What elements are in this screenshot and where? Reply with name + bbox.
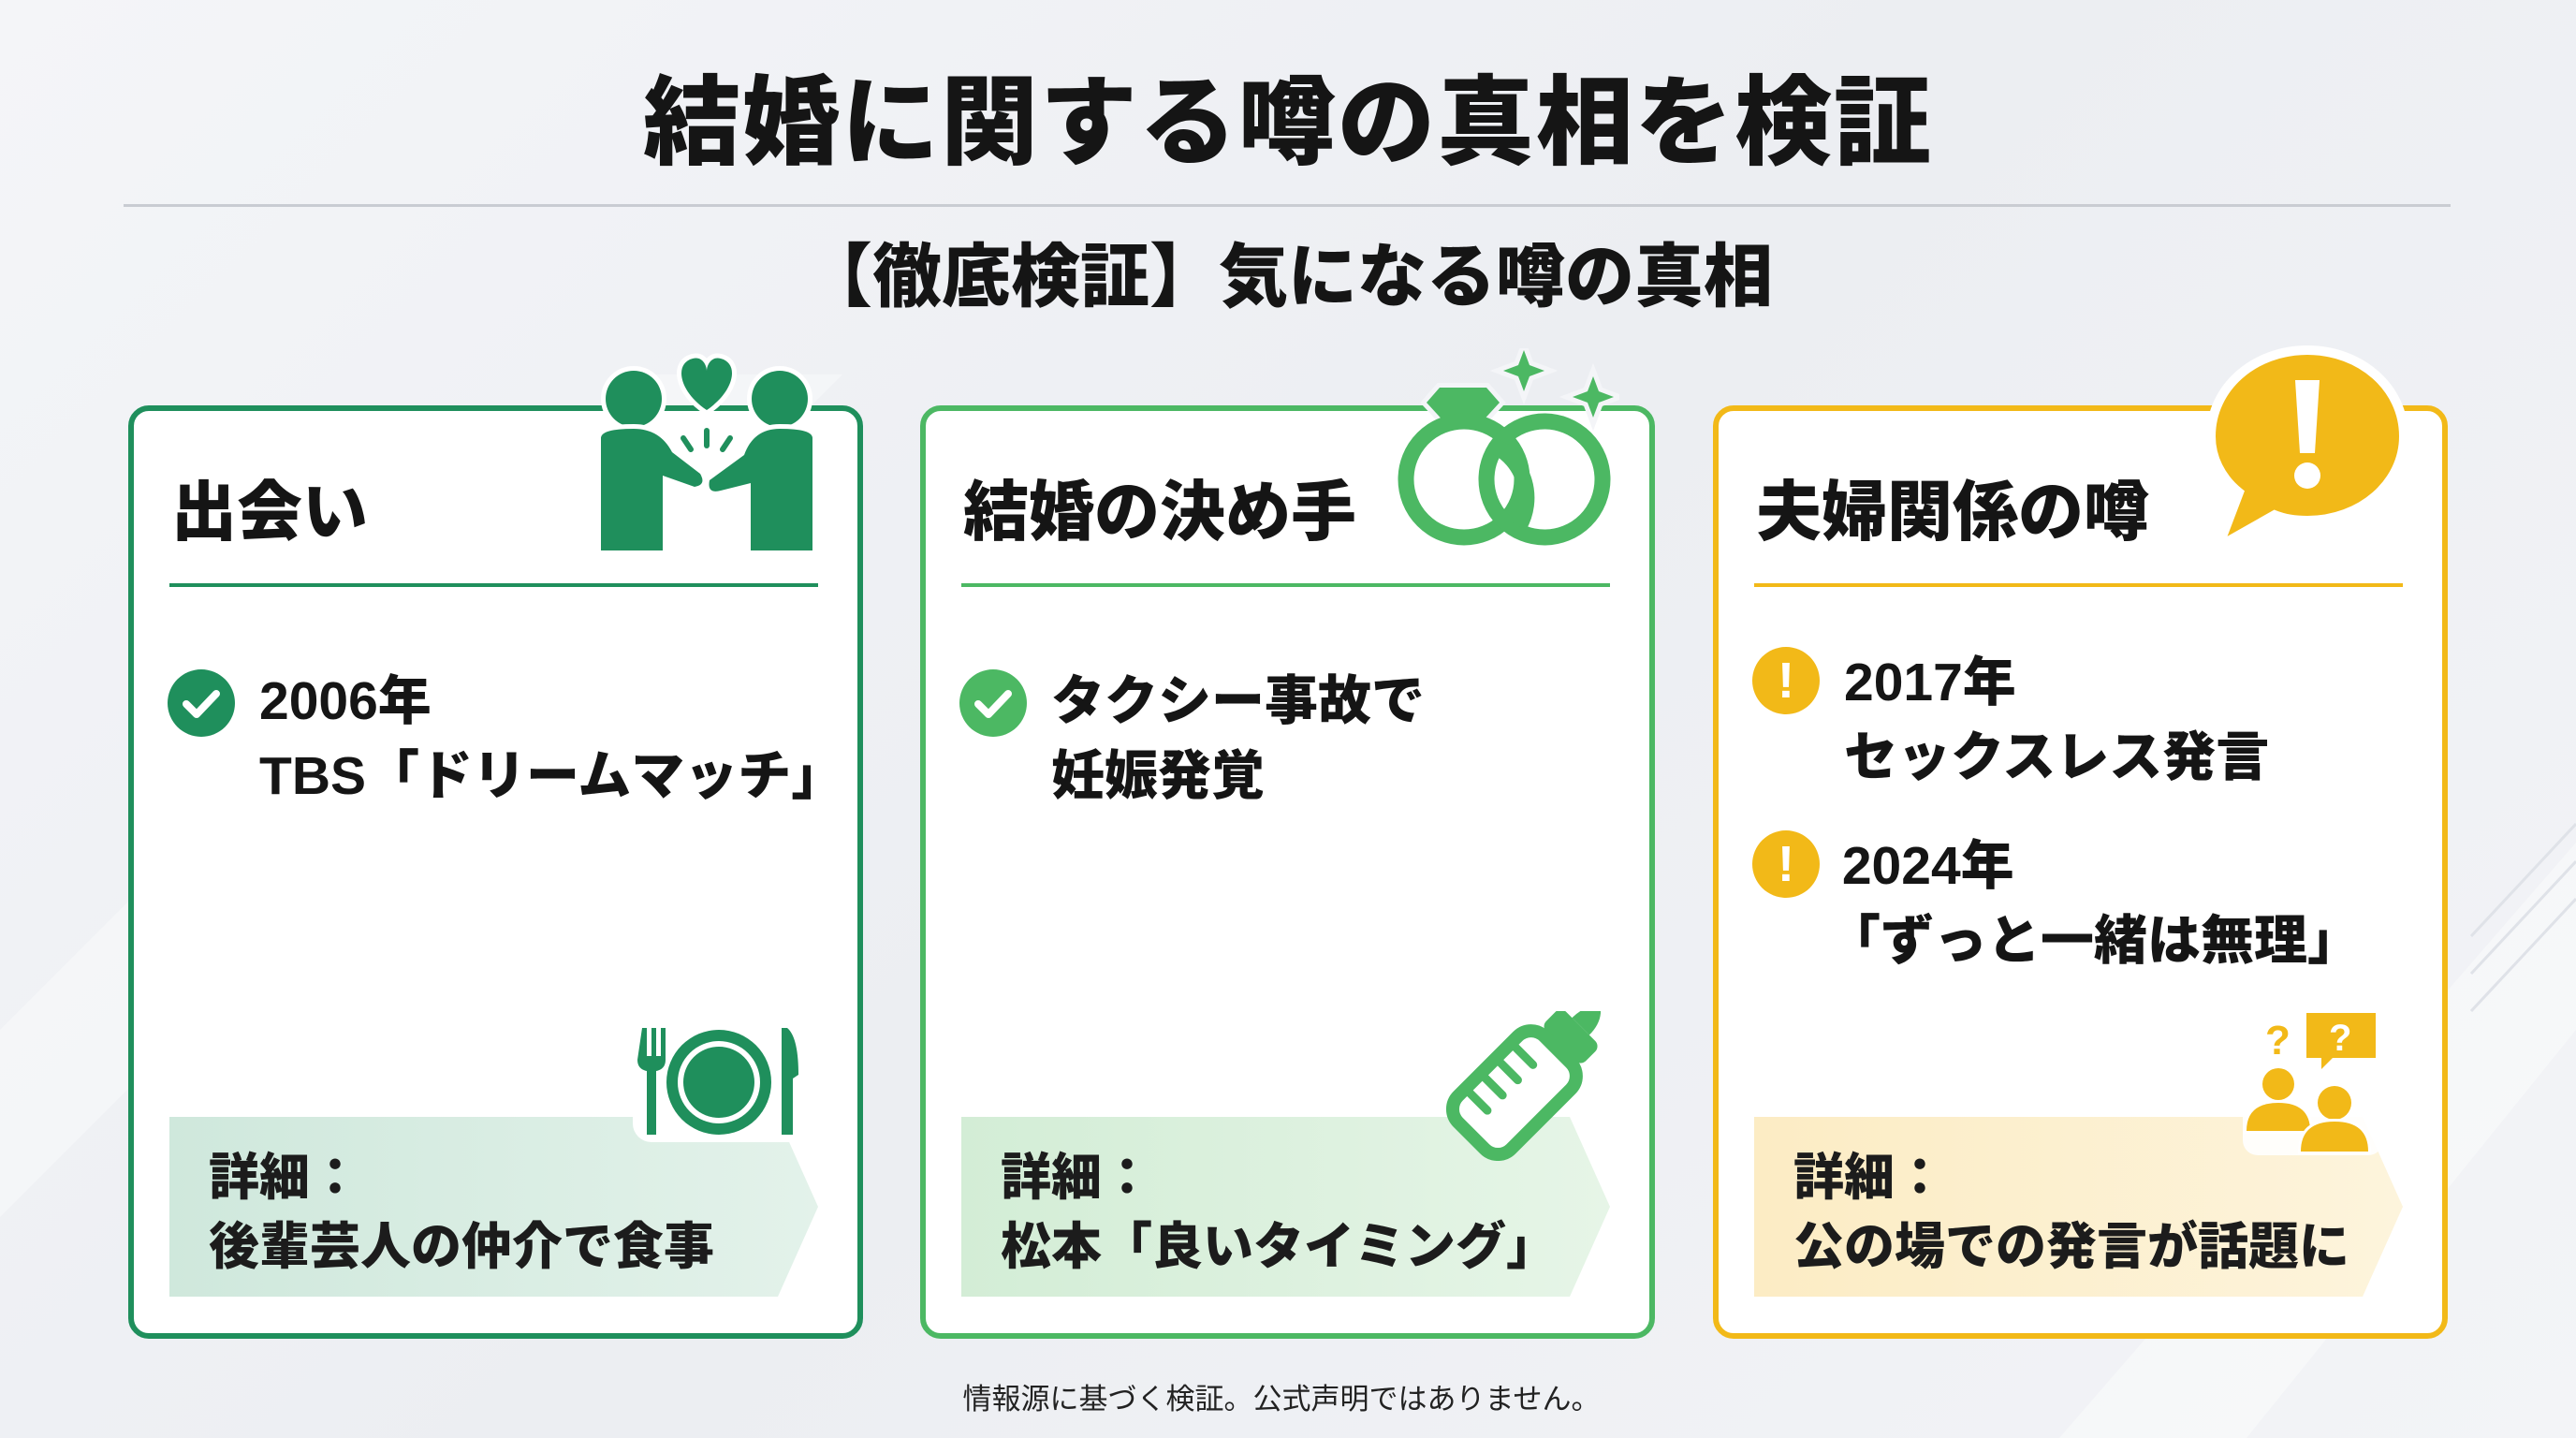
panel: 出会い <box>128 405 863 1339</box>
icon: confused people <box>2243 1013 2378 1155</box>
heading: 結婚の決め手: 結婚の決め手 <box>963 476 1356 549</box>
icon: exclamation <box>1752 830 1820 898</box>
icon: people with heart <box>601 354 812 550</box>
item: 2017年: 2017年 <box>1844 653 2016 712</box>
item: 2024年 <box>1752 830 2361 971</box>
item: 2006年: 2006年 <box>259 671 432 731</box>
detail box <box>169 1117 818 1297</box>
detail text: 松本「良いタイミング」 <box>1001 1219 1557 1275</box>
icon: speech bubble exclamation <box>2210 345 2405 536</box>
detail text: 後輩芸人の仲介で食事 <box>209 1219 714 1275</box>
title divider <box>124 204 2451 207</box>
item: タクシー事故: 妊娠発覚 <box>1051 746 1265 806</box>
panel: 夫婦関係の噂 <box>1713 405 2448 1339</box>
icon: confused people: ? <box>2265 1018 2291 1064</box>
panel: 結婚の決め手 <box>920 405 1655 1339</box>
item: 2017年: セックスレス発言 <box>1844 727 2269 787</box>
item: タクシー事故 <box>959 669 1425 806</box>
item: 2024年: 2024年 <box>1842 836 2014 896</box>
detail text: 詳細： <box>1793 1150 1945 1206</box>
detail text: 詳細： <box>209 1150 360 1206</box>
detail box <box>1754 1117 2403 1297</box>
icon: check <box>168 669 235 737</box>
detail box <box>961 1117 1610 1297</box>
icon: plate and cutlery <box>633 1028 798 1142</box>
icon: check <box>959 669 1027 737</box>
footer note: 情報源に基づく検証。公式声明ではありません。 <box>962 1383 1601 1416</box>
item: 2006年: TBS「ドリームマッチ」 <box>259 746 844 806</box>
subtitle: 【徹底検証】気になる噂の真相 <box>803 238 1773 315</box>
detail text <box>1793 1150 2349 1275</box>
item: 2006年 <box>168 669 844 806</box>
detail text: 公の場での発言が話題に <box>1793 1219 2349 1275</box>
icon: exclamation <box>1752 647 1820 714</box>
detail text <box>1001 1150 1557 1275</box>
heading: 夫婦関係の噂: 夫婦関係の噂 <box>1756 476 2149 549</box>
heading: 出会い: 出会い <box>171 476 368 549</box>
item: 2017年 <box>1752 647 2269 787</box>
icon: rings <box>1398 350 1614 545</box>
icon: confused people: ? <box>2329 1018 2351 1059</box>
item: タクシー事故: タクシー事故で <box>1051 671 1425 731</box>
detail text <box>209 1150 714 1275</box>
detail text: 詳細： <box>1001 1150 1152 1206</box>
icon: exclamation: ! <box>1778 836 1794 892</box>
icon: exclamation: ! <box>1778 653 1794 709</box>
item: 2024年: 「ずっと一緒は無理」 <box>1827 911 2361 971</box>
icon: baby bottle <box>1445 1011 1601 1161</box>
title: 結婚に関する噂の真相を検証 <box>643 69 1933 178</box>
